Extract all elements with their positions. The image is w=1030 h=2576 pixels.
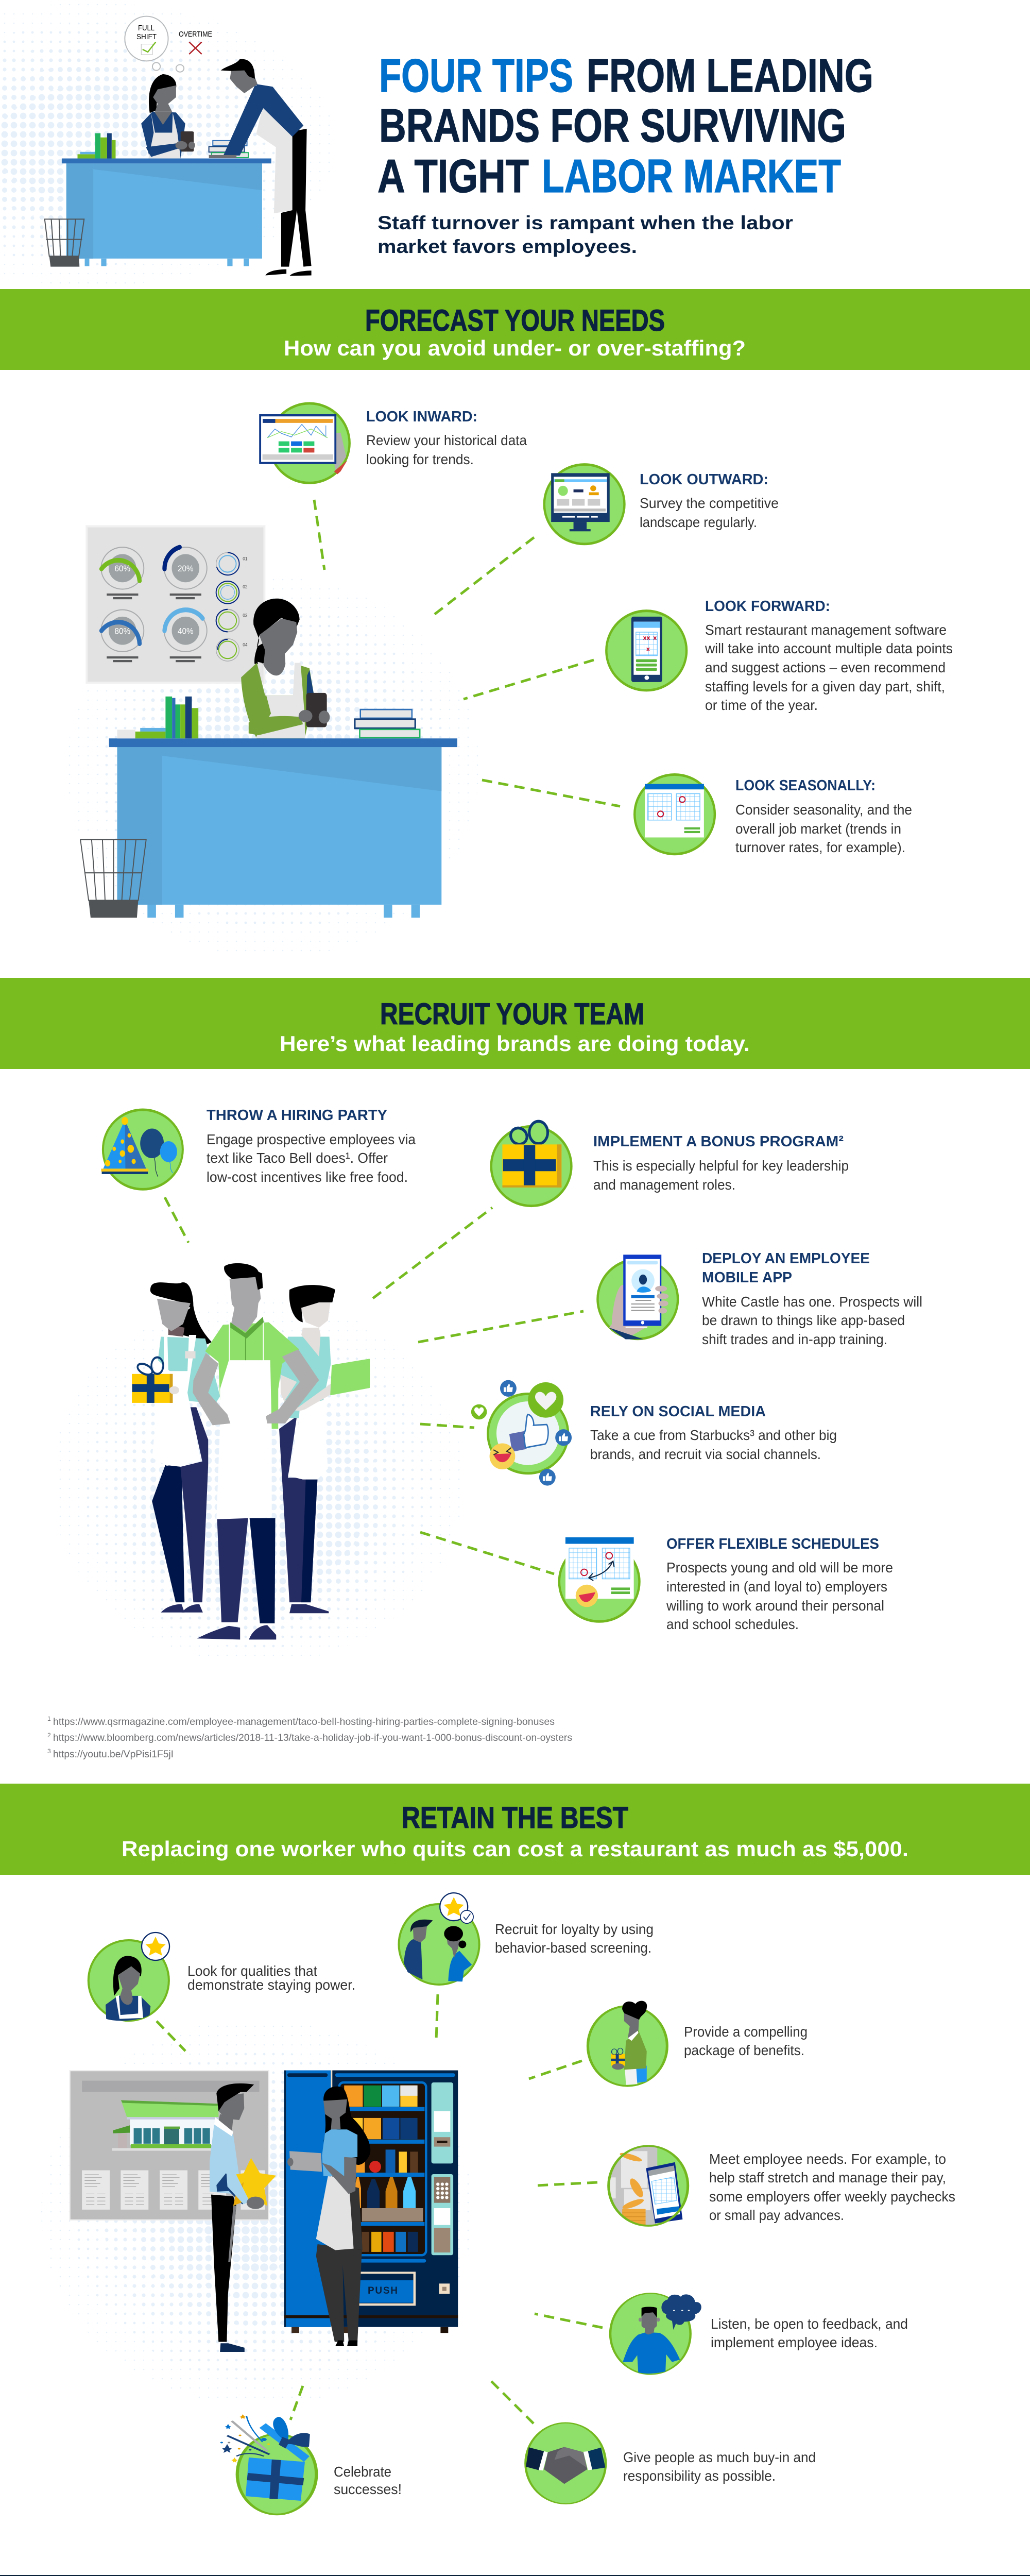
connector: buy-in: [491, 2381, 535, 2425]
icon: monitor: [544, 465, 624, 544]
icon: handshake: [525, 2423, 606, 2504]
text: celebrate: Celebrate: [334, 2464, 391, 2480]
section banner: retain the best: [0, 1784, 1030, 1875]
text: loyalty: [495, 1921, 654, 1956]
icon: opened gift with confetti: [220, 2414, 316, 2514]
analytics wall board: 01: [243, 556, 248, 562]
text: qualities: Look for qualities that: [187, 1963, 317, 1979]
full shift and overtime labels: [136, 24, 212, 41]
retention illustration: [70, 2071, 458, 2352]
hero woman: [141, 74, 195, 159]
text: benefits: [684, 2024, 808, 2058]
icon: man with speech cloud: [610, 2293, 701, 2374]
heading and text: look inward: LOOK INWARD:: [366, 409, 477, 425]
text: qualities: [187, 1963, 355, 1993]
heading and text: look outward: landscape regularly.: [640, 514, 757, 530]
heading and text: look outward: Survey the competitive: [640, 495, 779, 511]
title: FROM LEADING: [587, 50, 873, 102]
analytics wall board: 04: [243, 642, 248, 647]
full shift and overtime labels: SHIFT: [136, 32, 157, 41]
heading and text: look seasonally: LOOK SEASONALLY:: [735, 777, 876, 794]
hero waste basket: [45, 219, 84, 267]
heading and text: look forward: LOOK FORWARD:: [705, 598, 830, 615]
text: buy-in: Give people as much buy-in and: [623, 2449, 816, 2465]
waste basket: [80, 840, 146, 918]
connector: look seasonally: [482, 780, 620, 806]
recruit halftone background: [52, 1298, 464, 1664]
full shift and overtime labels: FULL: [138, 24, 154, 32]
analytics wall board: 20%: [178, 564, 194, 573]
footnotes: https://www.bloomberg.com/news/articles/2018-11-13/take-a-holiday-job-if-you-want-1-000-bonus-discount-on-oysters: [53, 1733, 572, 1743]
restaurant poster board: [70, 2071, 269, 2220]
connector: flexible schedules: [420, 1532, 554, 1574]
heading and text: look forward: or time of the year.: [705, 697, 818, 713]
heading and text: look seasonally: overall job market (trends in: [735, 821, 901, 837]
analytics wall board: 40%: [178, 626, 194, 636]
connector: loyalty: [436, 1994, 438, 2040]
section banner: recruit your team: Here’s what leading brands are doing today.: [280, 1031, 750, 1056]
connector: look outward: [432, 537, 534, 616]
full shift and overtime labels: OVERTIME: [179, 30, 212, 39]
connector: benefits: [529, 2061, 582, 2079]
footnotes: https://www.qsrmagazine.com/employee-management/taco-bell-hosting-hiring-parties-complete-signing-bonuses: [53, 1717, 555, 1727]
section banner: forecast your needs: How can you avoid under- or over-staffing?: [284, 336, 746, 360]
hero man: [209, 59, 312, 276]
heading and text: mobile app: DEPLOY AN EMPLOYEE: [702, 1250, 870, 1267]
title: LABOR MARKET: [542, 150, 841, 202]
woman with tablet at vending machine: [287, 2087, 370, 2346]
analytics wall board: 60%: [114, 564, 130, 573]
connector: mobile app: [418, 1311, 583, 1342]
connector: hiring party: [165, 1197, 188, 1243]
text: buy-in: responsibility as possible.: [623, 2468, 776, 2484]
heading and text: bonus program: IMPLEMENT A BONUS PROGRAM²: [593, 1133, 844, 1150]
icon: flexible schedule calendar: [559, 1537, 639, 1621]
text: employee needs: help staff stretch and manage their pay,: [709, 2170, 946, 2185]
heading and text: hiring party: low-cost incentives like free food.: [207, 1169, 408, 1185]
heading and text: mobile app: [702, 1250, 922, 1347]
footnotes: 2: [47, 1732, 51, 1739]
heading and text: social media: RELY ON SOCIAL MEDIA: [590, 1403, 766, 1420]
text: employee needs: or small pay advances.: [709, 2207, 844, 2223]
connector: qualities: [157, 2021, 185, 2051]
text: employee needs: Meet employee needs. For example, to: [709, 2151, 946, 2167]
title: BRANDS FOR SURVIVING: [379, 100, 846, 152]
connector: bonus program: [373, 1208, 492, 1298]
analytics wall board: 02: [243, 584, 248, 589]
text: celebrate: successes!: [334, 2481, 402, 2497]
title: A TIGHT: [377, 150, 529, 202]
section banner: recruit your team: [0, 978, 1030, 1069]
section banner: recruit your team: RECRUIT YOUR TEAM: [380, 997, 644, 1031]
counter: [109, 738, 457, 918]
icon: interview pair with star badge: [399, 1893, 479, 1985]
center man with apron: [193, 1263, 319, 1639]
heading and text: bonus program: and management roles.: [593, 1177, 735, 1193]
footnotes: 1: [47, 1715, 51, 1722]
icon: phone with schedule: [606, 611, 686, 690]
heading and text: look forward: staffing levels for a given day part, shift,: [705, 679, 945, 694]
footer: [0, 2575, 1030, 2576]
retain halftone background: [41, 2019, 474, 2406]
section banner: retain the best: RETAIN THE BEST: [402, 1801, 628, 1835]
heading and text: look outward: [640, 471, 779, 530]
heading and text: hiring party: THROW A HIRING PARTY: [207, 1107, 387, 1124]
heading and text: look forward: and suggest actions – even recommend: [705, 659, 946, 675]
stack of books on counter right: [355, 709, 420, 738]
heading and text: mobile app: shift trades and in-app training.: [702, 1331, 887, 1347]
title: [377, 50, 873, 202]
heading and text: look seasonally: Consider seasonality, and the: [735, 802, 912, 818]
text: employee needs: [709, 2151, 955, 2223]
footnotes: 3: [47, 1748, 51, 1755]
text: buy-in: [623, 2449, 816, 2484]
icon: calendars: [634, 774, 715, 854]
icon: coins and schedule phone: [608, 2145, 688, 2227]
connector: look inward: [314, 500, 324, 570]
connector: look forward: [464, 660, 594, 699]
heading and text: mobile app: be drawn to things like app-based: [702, 1312, 905, 1328]
hero books: [78, 133, 248, 159]
heading and text: hiring party: [207, 1107, 416, 1185]
heading and text: social media: Take a cue from Starbucks³ and other big: [590, 1427, 837, 1443]
text: listen: Listen, be open to feedback, and: [711, 2316, 908, 2332]
analytics wall board: 03: [243, 613, 248, 618]
text: listen: [711, 2316, 908, 2350]
heading and text: look forward: Smart restaurant management software: [705, 622, 947, 638]
hero subtitle: Staff turnover is rampant when the labor: [377, 212, 793, 233]
heading and text: flexible schedules: [666, 1536, 893, 1632]
woman with tablet: [241, 599, 330, 739]
text: qualities: demonstrate staying power.: [187, 1977, 355, 1993]
heading and text: look seasonally: [735, 777, 912, 855]
heading and text: flexible schedules: and school schedules.: [666, 1616, 799, 1632]
connector: listen: [535, 2314, 603, 2328]
text: benefits: package of benefits.: [684, 2042, 804, 2058]
heading and text: bonus program: [593, 1133, 849, 1193]
section banner: retain the best: Replacing one worker who quits can cost a restaurant as much as $5,000.: [122, 1837, 908, 1861]
heading and text: look forward: will take into account multiple data points: [705, 640, 953, 656]
team of three employees: [132, 1263, 369, 1639]
hero halftone background: [0, 3, 335, 286]
forecast halftone background: [67, 577, 479, 958]
heading and text: look inward: looking for trends.: [366, 451, 474, 467]
right woman with tablet: [279, 1285, 369, 1613]
heading and text: look inward: Review your historical data: [366, 432, 527, 448]
text: loyalty: Recruit for loyalty by using: [495, 1921, 654, 1937]
heading and text: flexible schedules: willing to work around their personal: [666, 1598, 884, 1614]
icon: phone in hand with app: [597, 1255, 678, 1339]
section banner: forecast your needs: [0, 289, 1030, 370]
text: listen: implement employee ideas.: [711, 2334, 878, 2350]
heading and text: social media: [590, 1403, 837, 1462]
analytics wall board: [87, 526, 264, 683]
connector: employee needs: [537, 2182, 597, 2185]
section banner: forecast your needs: FORECAST YOUR NEEDS: [365, 304, 665, 337]
analytics wall board: 80%: [114, 626, 130, 636]
icon: tablet with chart: [260, 403, 350, 483]
push label: PUSH: [368, 2285, 398, 2296]
icon: gift box: [491, 1121, 571, 1206]
footnotes: https://youtu.be/VpPisi1F5jI: [53, 1749, 174, 1760]
heading and text: mobile app: MOBILE APP: [702, 1269, 792, 1286]
icon: woman with star badge: [89, 1933, 169, 2021]
connector: social media: [420, 1424, 474, 1428]
thought bubble: [125, 16, 202, 72]
icon: party hat and balloons: [101, 1110, 183, 1189]
heading and text: flexible schedules: interested in (and loyal to) employers: [666, 1579, 887, 1595]
icon: social media reactions: [471, 1380, 572, 1486]
vending machine: [284, 2071, 458, 2333]
hero counter: [62, 159, 271, 266]
heading and text: look seasonally: turnover rates, for example).: [735, 839, 905, 855]
hero subtitle: [377, 212, 793, 257]
title: FOUR TIPS: [379, 50, 573, 102]
man holding star: [210, 2083, 276, 2352]
left woman with gift: [132, 1282, 220, 1613]
stack of books on counter left: [117, 697, 198, 738]
heading and text: look forward: [705, 598, 953, 713]
text: employee needs: some employers offer weekly paychecks: [709, 2189, 955, 2205]
text: benefits: Provide a compelling: [684, 2024, 808, 2040]
icon: woman with gift: [588, 2001, 667, 2086]
heading and text: flexible schedules: Prospects young and old will be more: [666, 1560, 893, 1575]
connector: celebrate: [290, 2386, 303, 2420]
heading and text: flexible schedules: OFFER FLEXIBLE SCHEDULES: [666, 1536, 879, 1552]
heading and text: look inward: [366, 409, 527, 467]
heading and text: social media: brands, and recruit via social channels.: [590, 1446, 821, 1462]
heading and text: look outward: LOOK OUTWARD:: [640, 471, 768, 488]
hero illustration: [45, 16, 312, 276]
heading and text: mobile app: White Castle has one. Prospects will: [702, 1294, 922, 1310]
text: loyalty: behavior-based screening.: [495, 1940, 651, 1956]
text: celebrate: [334, 2464, 402, 2497]
heading and text: bonus program: This is especially helpful for key leadership: [593, 1158, 849, 1174]
heading and text: hiring party: text like Taco Bell does¹. Offer: [207, 1150, 388, 1166]
heading and text: hiring party: Engage prospective employees via: [207, 1131, 416, 1147]
hero subtitle: market favors employees.: [377, 236, 637, 257]
forecast illustration: [80, 526, 457, 918]
footnotes: [47, 1715, 572, 1760]
